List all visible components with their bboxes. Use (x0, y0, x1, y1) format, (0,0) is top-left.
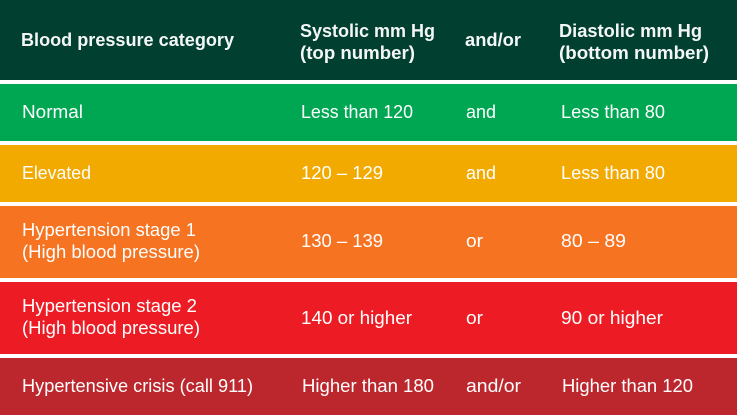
header row: (top number) (300, 43, 415, 63)
row: hypertension stage 2: 140 or higher (301, 307, 412, 328)
header row: (bottom number) (559, 43, 709, 63)
row: normal: Less than 120 (301, 101, 413, 122)
row: hypertension stage 1: (High blood pressure) (22, 241, 200, 262)
row: elevated (0, 145, 737, 202)
row: hypertension stage 1: 130 – 139 (301, 230, 383, 251)
row: hypertension stage 1: 80 – 89 (561, 230, 626, 251)
header row: Blood pressure category (21, 30, 234, 50)
row: elevated: Elevated (22, 162, 91, 183)
row: normal: and (466, 101, 496, 122)
row: normal (0, 84, 737, 141)
row: elevated: Less than 80 (561, 162, 665, 183)
row: hypertension stage 1 (0, 206, 737, 278)
row: hypertension stage 2: 90 or higher (561, 307, 663, 328)
row: hypertension stage 2: (High blood pressure) (22, 317, 200, 338)
row: hypertensive crisis: and/or (466, 375, 521, 396)
row: hypertensive crisis: Higher than 180 (302, 375, 434, 396)
row: elevated: and (466, 162, 496, 183)
header row (0, 0, 737, 80)
row: hypertension stage 2: or (466, 307, 483, 328)
row: hypertension stage 2 (0, 282, 737, 354)
header row: Diastolic mm Hg (559, 21, 702, 41)
row: hypertensive crisis (0, 358, 737, 415)
row: elevated: 120 – 129 (301, 162, 383, 183)
header row: Systolic mm Hg (300, 21, 435, 41)
row: hypertensive crisis: Higher than 120 (562, 375, 693, 396)
row: normal: Normal (22, 101, 83, 122)
row: hypertensive crisis: Hypertensive crisis (call 911) (22, 375, 253, 396)
header row: and/or (465, 30, 521, 50)
row: hypertension stage 2: Hypertension stage 2 (22, 295, 197, 316)
row: normal: Less than 80 (561, 101, 665, 122)
row: hypertension stage 1: or (466, 230, 483, 251)
row: hypertension stage 1: Hypertension stage 1 (22, 219, 196, 240)
